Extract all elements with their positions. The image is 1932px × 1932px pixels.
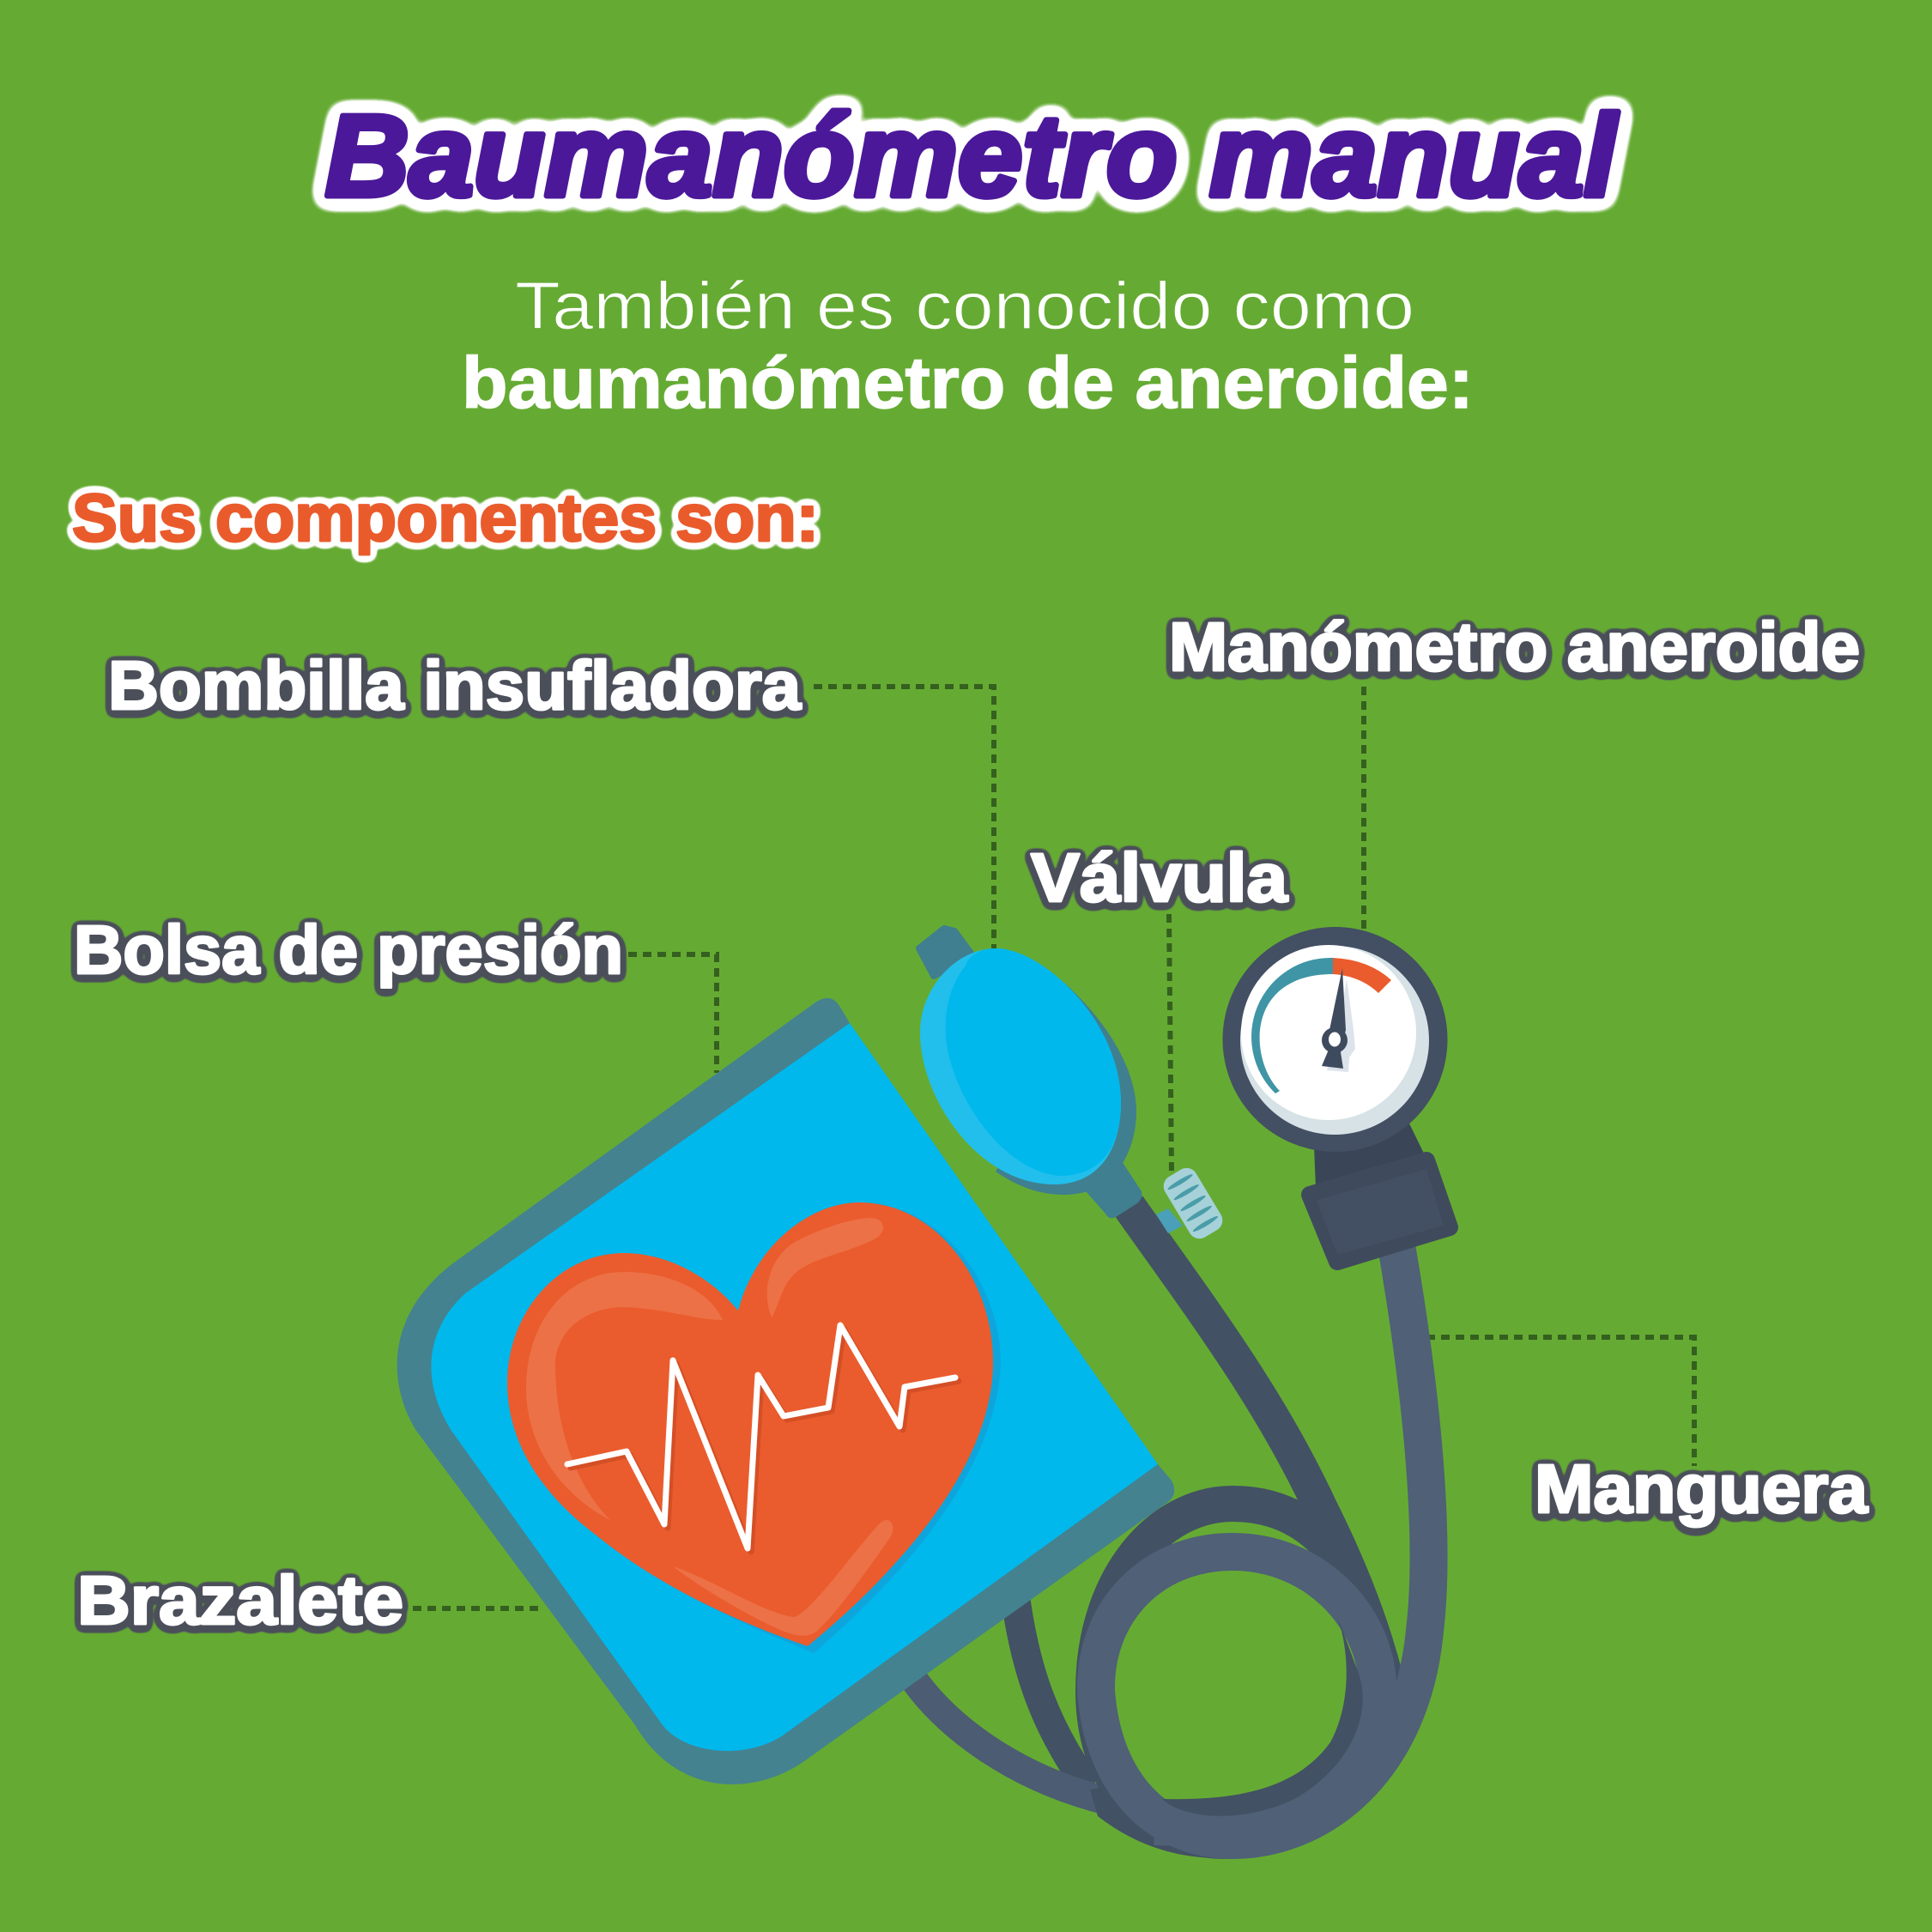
gauge block inner [1317,1169,1444,1255]
bulb back [996,983,1136,1195]
valve stem [1156,1208,1183,1233]
needle [1322,968,1346,1069]
connector: bolsa [628,954,717,1073]
gauge bezel [1222,927,1447,1152]
title: Baumanómetro manual [325,91,1618,221]
bulb neck [1080,1159,1142,1218]
gauge face [1241,945,1416,1120]
hose: from bulb [1129,1206,1395,1717]
needle shadow [1327,978,1355,1072]
gauge shade [1240,946,1429,1135]
bulb end cap [919,929,972,976]
label: valvula: Válvula [1031,839,1288,916]
subtitle [462,268,1474,423]
heart [507,1202,993,1646]
label: manguera: Manguera [1535,1451,1868,1527]
bulb rim [920,948,1121,1184]
valve [1156,1164,1226,1243]
heart shadow [507,1202,1001,1653]
label: manometro: Manómetro aneroide [1169,609,1860,685]
hoses [910,1206,1429,1857]
connector: bombilla [814,687,994,948]
hose: main front loop [1096,1236,1429,1840]
hose: inner crescent [1162,1614,1363,1816]
connector: brazalete [413,1606,542,1611]
cuff band [397,998,1174,1784]
ecg line [567,1325,955,1548]
gauge red arc [1333,958,1391,993]
hose: second from cuff [1015,1596,1088,1787]
cuff blue face [431,1023,1158,1751]
bulb [919,929,1142,1218]
section heading: Sus componentes son: [72,480,819,555]
hose: bottom dark wedge [1090,1785,1219,1857]
label: bombilla: Bombilla insufladora [108,647,802,724]
hose: dark back ring [1093,1504,1339,1841]
connector: manguera [1426,1337,1694,1466]
needle hub [1322,1027,1348,1053]
connector: valvula [1169,914,1172,1172]
gauge block [1310,1160,1450,1262]
ecg line shadow [571,1329,959,1552]
heart highlights [526,1218,893,1636]
subtitle: También es conocido como [515,268,1414,343]
connector: manometro [1361,687,1366,930]
label: brazalete: Brazalete [77,1562,403,1638]
label: bolsa: Bolsa de presión [74,911,623,988]
gauge neck [1314,1120,1426,1189]
hose: lower from cuff [910,1674,1103,1800]
cuff [397,998,1174,1784]
valve knob [1160,1164,1226,1243]
valve ridges [1166,1172,1219,1233]
gauge teal arc [1251,958,1333,1093]
subtitle: baumanómetro de aneroide: [462,342,1474,423]
needle pivot [1329,1032,1341,1047]
gauge [1222,927,1450,1262]
bulb face [946,948,1121,1176]
